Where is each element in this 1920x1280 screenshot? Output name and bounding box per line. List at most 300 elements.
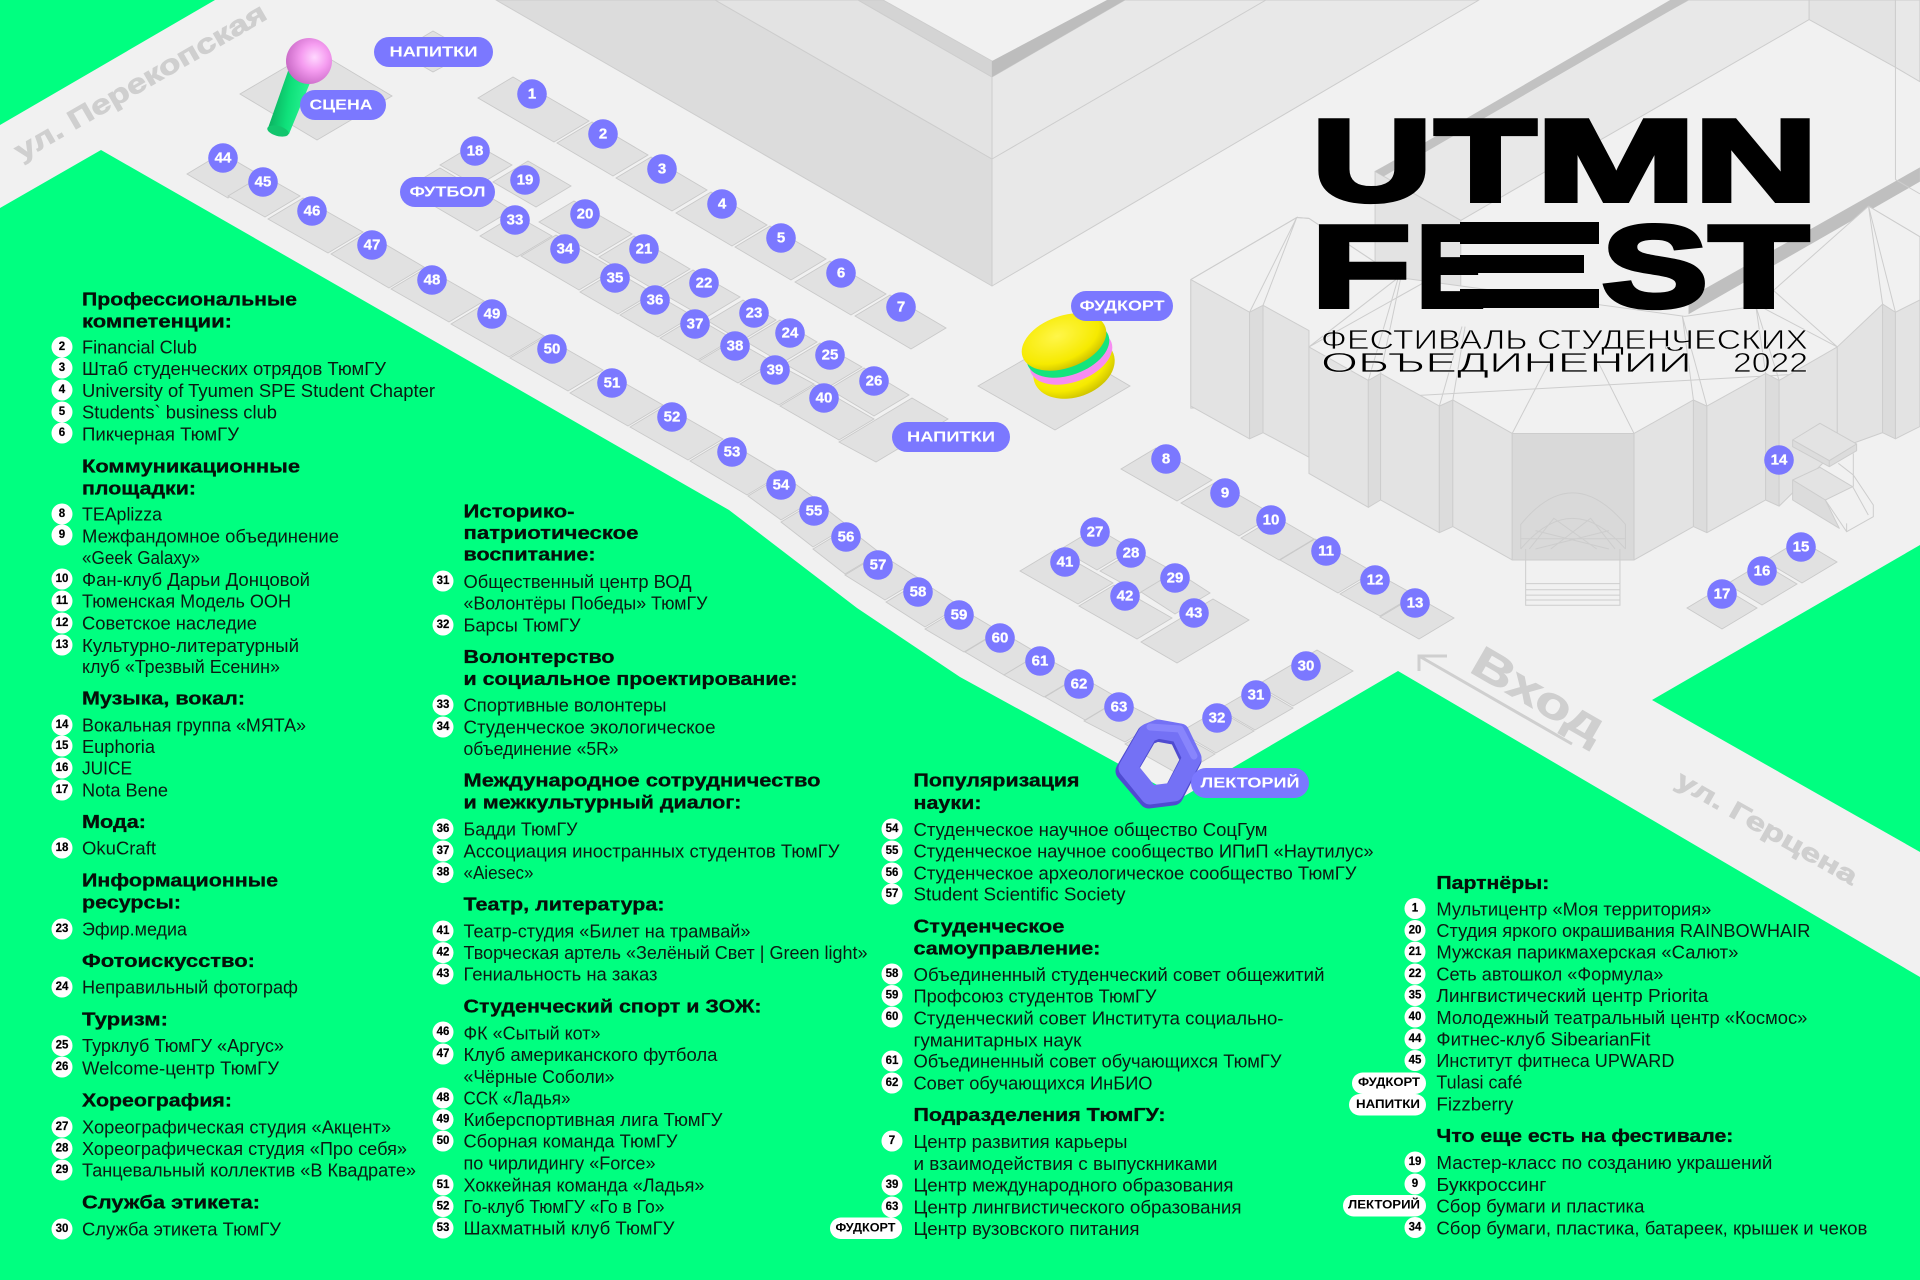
pin 10: 10: [1263, 512, 1279, 528]
heading: компетенции:: [82, 310, 232, 332]
items: 44: [1409, 1033, 1422, 1045]
pin 53: [717, 437, 747, 467]
items: 16: [56, 762, 68, 774]
items: 25: [56, 1040, 69, 1052]
heading: Театр, литература:: [464, 894, 664, 914]
pin 23: [739, 298, 769, 328]
pin 45: [248, 167, 278, 197]
items: 24: [56, 981, 69, 993]
items: Центр международного образования: [914, 1174, 1234, 1196]
heading: Коммуникационные: [82, 456, 300, 476]
pin 43: [1179, 598, 1209, 628]
items: Клуб американского футбола: [464, 1044, 718, 1065]
pill: football: ФУТБОЛ: [410, 184, 486, 200]
items: 8: [59, 508, 66, 520]
items: 1: [1412, 902, 1419, 914]
section: student sport: [432, 996, 762, 1238]
pin 31: 31: [1248, 686, 1264, 704]
pin 41: 41: [1057, 554, 1073, 570]
map buildings: [496, 0, 1920, 605]
pin 28: [1116, 538, 1146, 568]
white tag: food court: ФУДКОРТ: [1358, 1077, 1420, 1089]
pin 49: 49: [484, 306, 500, 322]
pin 13: 13: [1407, 594, 1423, 612]
items: [1349, 898, 1810, 1116]
white tag: drinks: [1349, 1094, 1426, 1116]
items: 29: [56, 1164, 68, 1176]
items: [882, 818, 1374, 904]
pin 27: [1080, 517, 1110, 547]
section: student self-government: [882, 916, 1324, 1094]
pin 29: 29: [1167, 570, 1183, 586]
map pill labels: [300, 37, 1309, 798]
pin 57: [863, 550, 893, 580]
pin 35: 35: [607, 270, 623, 286]
section: photography: [52, 950, 298, 998]
pin 46: [297, 196, 327, 226]
pin 48: [417, 265, 447, 295]
pin 19: [510, 165, 540, 195]
pin 51: [597, 368, 627, 398]
section: etiquette service: [52, 1192, 281, 1240]
heading: [82, 288, 297, 332]
heading: Мода:: [82, 811, 146, 832]
items: 28: [56, 1143, 69, 1155]
items: Тюменская Модель ООН: [82, 590, 291, 612]
section: science popularisation: [882, 770, 1374, 904]
items: 18: [56, 842, 69, 854]
pin 54: 54: [773, 476, 790, 494]
pin 45: 45: [255, 174, 271, 190]
items: объединение «5R»: [464, 738, 618, 759]
items: 19: [1409, 1156, 1421, 1168]
heading: патриотическое: [464, 522, 638, 543]
items: Student Scientific Society: [914, 884, 1126, 904]
section: university departments: [830, 1104, 1242, 1239]
pin 14: [1764, 445, 1794, 475]
items: [52, 714, 306, 800]
pin 32: 32: [1209, 710, 1225, 726]
items: University of Tyumen SPE Student Chapter: [82, 380, 435, 401]
pin 17: [1707, 579, 1737, 609]
heading: Информационные: [82, 870, 278, 890]
pin 42: 42: [1117, 588, 1133, 604]
items: 48: [437, 1092, 450, 1104]
pin 63: 63: [1111, 698, 1127, 716]
pin 59: [944, 600, 974, 630]
pill: drinks south: НАПИТКИ: [907, 428, 995, 446]
pin 34: 34: [557, 240, 574, 258]
items: 56: [886, 867, 898, 879]
section: partners: [1349, 872, 1810, 1116]
pin 11: 11: [1318, 542, 1334, 560]
items: 63: [886, 1201, 898, 1213]
items: Сеть автошкол «Формула»: [1436, 964, 1663, 984]
pin 20: 20: [577, 206, 593, 222]
pin 25: 25: [822, 346, 838, 364]
pin 23: 23: [746, 304, 762, 322]
pin 44: [208, 143, 238, 173]
title line UTMN: T: [1435, 96, 1536, 226]
items: Совет обучающихся ИнБИО: [914, 1072, 1152, 1094]
subtitle: ФЕСТИВАЛЬ СТУДЕНЧЕСКИХ: [1321, 324, 1808, 355]
heading: площадки:: [82, 478, 196, 498]
items: 45: [1409, 1054, 1422, 1066]
items: 9: [1412, 1178, 1418, 1190]
heading: [82, 456, 300, 498]
items: Танцевальный коллектив «В Квадрате»: [82, 1160, 416, 1180]
items: Общественный центр ВОД: [464, 571, 692, 592]
items: 17: [56, 784, 68, 796]
pin 54: [766, 470, 796, 500]
pin 39: 39: [767, 362, 783, 378]
icon: burger (food court): [1014, 303, 1123, 410]
pin 60: 60: [992, 630, 1008, 646]
heading: Служба этикета:: [82, 1192, 260, 1212]
heading: воспитание:: [464, 544, 596, 564]
heading: Историко-: [464, 500, 574, 522]
pin 25: [815, 340, 845, 370]
items: 21: [1409, 946, 1422, 958]
pin 52: 52: [664, 408, 680, 426]
items: Советское наследие: [82, 612, 257, 634]
title line FEST: E: [1417, 202, 1485, 332]
items: Объединенный совет обучающихся ТюмГУ: [914, 1050, 1282, 1072]
items: Financial Club: [82, 336, 197, 358]
white tag: lecture hall: [1343, 1195, 1426, 1216]
pin 4: [707, 189, 737, 219]
items: Гениальность на заказ: [464, 964, 658, 984]
pin 62: 62: [1071, 676, 1087, 692]
legend column 4: [1343, 872, 1868, 1238]
pin 15: [1786, 532, 1816, 562]
pin 61: 61: [1032, 652, 1048, 670]
pin 24: [775, 318, 805, 348]
items: [432, 818, 840, 883]
heading: [464, 770, 820, 812]
items: Центр вузовского питания: [914, 1218, 1140, 1239]
subtitle: ОБЪЕДИНЕНИЙ: [1321, 347, 1692, 378]
pin 33: 33: [507, 212, 523, 228]
section: fashion: [52, 811, 156, 858]
title line UTMN: M: [1536, 96, 1696, 226]
items: 10: [56, 573, 68, 585]
items: 12: [56, 617, 68, 629]
pin 56: 56: [838, 528, 854, 546]
pin 16: 16: [1754, 562, 1770, 580]
items: [830, 1130, 1242, 1239]
items: Студенческое научное сообщество ИПиП «Наутилус»: [914, 840, 1374, 862]
pill: lecture hall: [1191, 768, 1309, 798]
section: international cooperation: [432, 770, 840, 883]
pin 19: 19: [517, 172, 533, 188]
items: 53: [437, 1222, 449, 1234]
items: «Чёрные Соболи»: [464, 1066, 614, 1087]
items: JUICE: [82, 758, 132, 778]
pin 18: 18: [467, 142, 483, 160]
section: volunteering: [432, 646, 798, 759]
icon: hexagon ring (lecture hall): [1126, 727, 1194, 798]
section: professional skills: [52, 288, 435, 444]
pin 58: 58: [910, 584, 926, 600]
heading: Туризм:: [82, 1008, 168, 1030]
items: 55: [886, 845, 899, 857]
pin 26: [859, 366, 889, 396]
pin 46: 46: [304, 202, 320, 220]
title line UTMN: N: [1694, 96, 1818, 226]
pin 35: [600, 263, 630, 293]
pin 49: [477, 299, 507, 329]
items: Барсы ТюмГУ: [464, 614, 581, 636]
items: Студенческое научное общество СоцГум: [914, 819, 1268, 840]
items: 6: [59, 427, 65, 439]
heading: [82, 870, 278, 912]
pin 4: 4: [718, 196, 727, 212]
items: Киберспортивная лига ТюмГУ: [464, 1109, 723, 1130]
pin 61: [1025, 646, 1055, 676]
pin 1: [517, 79, 547, 109]
heading: [464, 500, 638, 564]
pin 14: 14: [1771, 452, 1788, 468]
items: Го-клуб ТюмГУ «Го в Го»: [464, 1196, 664, 1217]
street label: Perekopskaya: ул. Перекопская: [9, 0, 272, 166]
items: 31: [437, 575, 450, 587]
items: 2: [59, 341, 65, 353]
pin 7: [886, 292, 916, 322]
heading: науки:: [914, 792, 982, 813]
items: 38: [437, 867, 450, 879]
section: patriotic education: [432, 500, 708, 636]
items: Турклуб ТюмГУ «Аргус»: [82, 1035, 284, 1056]
white tag: food court: [830, 1218, 902, 1239]
building: main palace with apse walls, roof and entrance: [1191, 206, 1920, 605]
items: 62: [886, 1077, 898, 1089]
heading: Подразделения ТюмГУ:: [914, 1104, 1166, 1125]
section: tourism: [52, 1008, 284, 1078]
items: 35: [1409, 990, 1422, 1002]
items: Лингвистический центр Priorita: [1436, 985, 1709, 1006]
pin 33: [500, 205, 530, 235]
section: choreography: [52, 1090, 416, 1180]
items: 51: [437, 1179, 450, 1191]
items: 43: [437, 968, 449, 980]
heading: и социальное проектирование:: [464, 668, 798, 689]
title line UTMN: [1312, 96, 1818, 226]
pin 26: 26: [866, 372, 882, 390]
items: Nota Bene: [82, 780, 168, 800]
pin 39: [760, 355, 790, 385]
heading: Волонтерство: [464, 646, 614, 667]
items: Профсоюз студентов ТюмГУ: [914, 986, 1157, 1006]
items: Сбор бумаги и пластика: [1436, 1196, 1645, 1216]
arrow: entrance direction: [1419, 656, 1572, 744]
items: 34: [437, 721, 450, 733]
items: 33: [437, 699, 449, 711]
items: Бадди ТюмГУ: [464, 818, 578, 840]
pin 10: [1256, 505, 1286, 535]
heading: Популяризация: [914, 770, 1080, 790]
pin 44: 44: [215, 150, 232, 166]
pin 18: [460, 136, 490, 166]
building: hall complex in title area: [1375, 0, 1920, 347]
pin 17: 17: [1714, 586, 1730, 602]
heading: Международное сотрудничество: [464, 770, 820, 790]
heading: Студенческое: [914, 916, 1064, 936]
section: communication venues: [52, 456, 339, 677]
items: 52: [437, 1200, 449, 1212]
pin 43: 43: [1186, 604, 1202, 622]
heading: самоуправление:: [914, 937, 1100, 958]
pin 3: 3: [658, 160, 666, 178]
pill: stage: [300, 90, 386, 120]
kiosk near stall 14: [1793, 423, 1873, 532]
pin 2: 2: [599, 126, 607, 142]
items: Студенческое археологическое сообщество ТюмГУ: [914, 862, 1357, 884]
pill: drinks north: НАПИТКИ: [390, 44, 478, 60]
stall plots on the map: [187, 31, 1837, 775]
items: Шахматный клуб ТюмГУ: [464, 1218, 675, 1238]
pin 5: 5: [777, 230, 785, 246]
items: Вокальная группа «МЯТА»: [82, 714, 306, 736]
items: Сбор бумаги, пластика, батареек, крышек и чеков: [1436, 1217, 1868, 1238]
pin 38: 38: [727, 338, 743, 354]
items: [882, 964, 1324, 1094]
pin 9: [1210, 478, 1240, 508]
pin 20: [570, 199, 600, 229]
pin 13: [1400, 588, 1430, 618]
items: [432, 920, 868, 984]
heading: [914, 770, 1080, 813]
items: 50: [437, 1135, 449, 1147]
building: north block: [496, 0, 1479, 286]
pin 28: 28: [1123, 544, 1139, 562]
pill: stage: СЦЕНА: [310, 96, 373, 114]
items: Хореографическая студия «Акцент»: [82, 1116, 391, 1138]
heading: Студенческий спорт и ЗОЖ:: [464, 996, 762, 1016]
pin 48: 48: [424, 272, 440, 288]
items: 11: [56, 595, 69, 607]
items: 37: [437, 845, 449, 857]
items: Fizzberry: [1436, 1094, 1514, 1114]
items: 58: [886, 968, 899, 980]
items: Студенческое экологическое: [464, 716, 716, 738]
pin 50: [537, 334, 567, 364]
heading: Партнёры:: [1436, 872, 1549, 893]
pin 57: 57: [870, 556, 886, 574]
items: [432, 570, 708, 636]
heading: [914, 916, 1100, 958]
items: Welcome-центр ТюмГУ: [82, 1058, 279, 1078]
items: ССК «Ладья»: [464, 1088, 570, 1108]
white tag: drinks: НАПИТКИ: [1356, 1099, 1420, 1111]
pin 31: [1241, 680, 1271, 710]
pin 22: 22: [696, 274, 712, 292]
items: Студия яркого окрашивания RAINBOWHAIR: [1436, 920, 1810, 941]
items: 47: [437, 1048, 449, 1060]
pin 12: [1360, 565, 1390, 595]
title line FEST: S: [1602, 202, 1708, 332]
pill: drinks north: [374, 37, 493, 67]
pin 30: [1291, 651, 1321, 681]
items: 39: [886, 1179, 898, 1191]
items: [52, 504, 339, 677]
items: Мужская парикмахерская «Салют»: [1436, 942, 1738, 962]
white tag: lecture hall: ЛЕКТОРИЙ: [1348, 1198, 1420, 1212]
items: 22: [1409, 968, 1421, 980]
items: Пикчерная ТюмГУ: [82, 424, 239, 444]
pin 42: [1110, 581, 1140, 611]
pin 34: [550, 234, 580, 264]
items: 41: [437, 925, 450, 937]
items: Мультицентр «Моя территория»: [1436, 898, 1711, 920]
items: 42: [437, 947, 449, 959]
pin 15: 15: [1793, 538, 1809, 556]
items: Хореографическая студия «Про себя»: [82, 1138, 407, 1159]
items: Молодежный театральный центр «Космос»: [1436, 1007, 1807, 1028]
items: 15: [56, 740, 69, 752]
pin 24: 24: [782, 324, 799, 342]
items: по чирлидингу «Force»: [464, 1152, 656, 1174]
items: 26: [56, 1061, 68, 1073]
pill: lecture hall: ЛЕКТОРИЙ: [1200, 774, 1300, 792]
pin 55: [799, 496, 829, 526]
subtitle: [1321, 324, 1808, 378]
items: Неправильный фотограф: [82, 976, 298, 998]
items: 7: [889, 1135, 895, 1147]
entrance label: Вход: [1463, 637, 1614, 753]
pin 21: [629, 234, 659, 264]
heading: Профессиональные: [82, 288, 297, 310]
items: Центр развития карьеры: [914, 1131, 1128, 1152]
items: 34: [1409, 1222, 1422, 1234]
items: 36: [437, 823, 449, 835]
pin 2: [588, 119, 618, 149]
items: 13: [56, 639, 68, 651]
pin 37: [680, 309, 710, 339]
pin 38: [720, 331, 750, 361]
section: what else at the festival: [1343, 1125, 1868, 1238]
heading: Музыка, вокал:: [82, 688, 245, 708]
icon: microphone (stage): [266, 38, 332, 139]
items: Объединенный студенческий совет общежитий: [914, 964, 1324, 985]
title: UTMN FEST: [1312, 96, 1818, 378]
items: 61: [886, 1055, 899, 1067]
pin 29: [1160, 563, 1190, 593]
pin 47: 47: [364, 236, 380, 254]
items: 46: [437, 1026, 449, 1038]
pin 6: 6: [837, 264, 845, 282]
items: [52, 1035, 284, 1078]
items: Эфир.медиа: [82, 918, 188, 940]
pin 62: [1064, 669, 1094, 699]
pill: drinks south: [892, 422, 1010, 452]
items: Ассоциация иностранных студентов ТюмГУ: [464, 840, 840, 862]
items: 54: [886, 823, 899, 835]
heading: и межкультурный диалог:: [464, 792, 742, 812]
pill: football: [400, 177, 495, 207]
numbered map pins: [208, 79, 1816, 733]
pin 50: 50: [544, 340, 560, 358]
white tag: food court: ФУДКОРТ: [836, 1222, 896, 1234]
items: Культурно-литературный: [82, 635, 299, 656]
legend column 3: [830, 770, 1374, 1239]
pin 22: [689, 268, 719, 298]
items: Межфандомное объединение: [82, 526, 339, 546]
items: TEAplizza: [82, 504, 163, 524]
title line FEST: T: [1709, 202, 1808, 332]
pin 6: [826, 258, 856, 288]
items: 23: [56, 923, 68, 935]
